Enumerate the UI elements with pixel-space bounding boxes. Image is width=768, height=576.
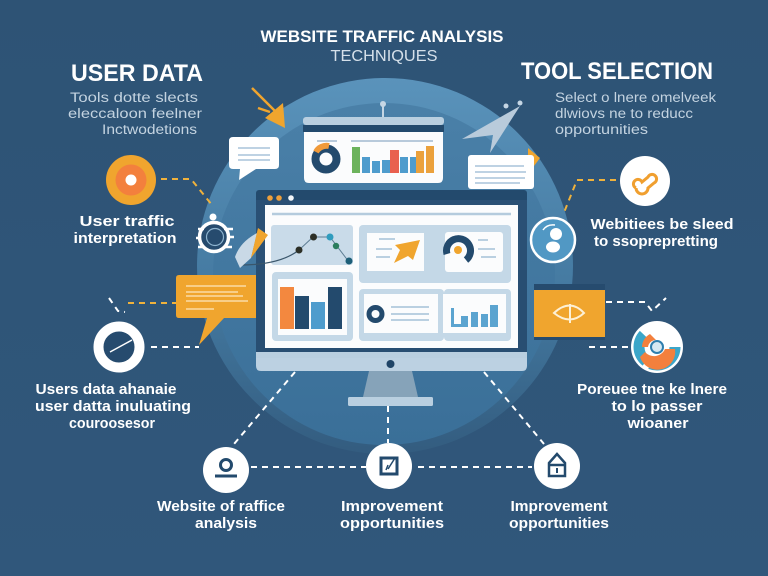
chart: donut <box>316 146 336 170</box>
label: improvement 1: Improvement <box>341 498 443 515</box>
title <box>260 28 504 65</box>
label: user traffic: interpretation <box>74 230 176 247</box>
label: websites: Webitiees be sleed <box>590 216 734 233</box>
connector: donut to box <box>589 346 632 348</box>
panel: top dashboard card <box>303 101 444 183</box>
label: website traffic analysis: Website of raffice <box>157 498 285 515</box>
icon: orange target <box>106 155 156 205</box>
text block: user data description: eleccaloon feelner <box>68 106 203 121</box>
text block: user data description <box>68 90 203 137</box>
label: websites <box>590 216 734 250</box>
label: users data: Users data ahanaie <box>36 381 176 398</box>
connector: bottom network <box>234 372 544 467</box>
label: users data: couroosesor <box>69 415 155 432</box>
label: website traffic analysis <box>157 498 285 532</box>
connector: ring to bubble <box>151 346 199 348</box>
label: improvement 1: opportunities <box>340 515 444 532</box>
icon: house <box>534 443 580 489</box>
text block: user data description: Tools dotte slects <box>70 90 198 105</box>
chart: bars <box>352 146 434 173</box>
heading: user data: USER DATA <box>71 60 203 87</box>
panel: arrow and spiral <box>359 225 511 283</box>
connector: target to gear <box>161 179 212 205</box>
heading: tool selection: TOOL SELECTION <box>521 58 713 85</box>
label: improvement 2: opportunities <box>509 515 609 532</box>
icon: chain <box>620 156 670 206</box>
monitor stand <box>363 371 418 397</box>
icon: blue circle people <box>531 218 575 262</box>
icon: colored donut <box>631 321 683 373</box>
label: website traffic analysis: analysis <box>195 515 257 532</box>
speech bubble: orange left <box>176 275 256 345</box>
background circles <box>197 78 573 454</box>
icon: white ring gauge <box>98 326 140 368</box>
label: users data: user datta inuluating <box>35 398 191 415</box>
text block: user data description: Inctwodetions <box>102 122 197 137</box>
speech bubble: left <box>229 137 279 180</box>
label: improvement 2 <box>509 498 609 532</box>
panel: small bars <box>443 289 511 341</box>
icon: gear <box>196 214 234 252</box>
arrow: orange top left <box>252 88 285 128</box>
panel: orange eye box <box>534 284 605 340</box>
icon: orange sail <box>235 228 268 268</box>
monitor <box>235 190 527 406</box>
panel: bar chart <box>272 272 353 341</box>
label: user traffic: User traffic <box>80 213 174 230</box>
connector: left bubble to circle <box>128 302 176 304</box>
label: pursue: to lo passer <box>612 398 703 415</box>
icon: location <box>203 447 249 493</box>
title: TECHNIQUES <box>330 48 438 65</box>
title: WEBSITE TRAFFIC ANALYSIS <box>260 28 504 46</box>
text block: tool selection description <box>555 90 716 137</box>
connector: chain to circle <box>563 180 616 215</box>
label: websites: to ssoprepretting <box>594 233 718 250</box>
text block: tool selection description: opportunities <box>555 122 648 137</box>
monitor screen <box>265 205 518 348</box>
label: pursue <box>577 381 727 432</box>
monitor frame <box>256 190 527 280</box>
text block: tool selection description: dlwiovs ne to reducc <box>555 106 693 121</box>
label: pursue: wioaner <box>626 415 689 432</box>
label: pursue: Poreuee tne ke lnere <box>577 381 727 398</box>
label: improvement 2: Improvement <box>510 498 608 515</box>
connector: eye box to donut <box>606 298 666 311</box>
panel: line chart <box>240 225 353 265</box>
arrow: paper plane top right <box>462 100 540 166</box>
label: users data <box>35 381 191 432</box>
icon: checkbox <box>366 443 412 489</box>
label: improvement 1 <box>340 498 444 532</box>
panel: ring list <box>359 289 444 341</box>
connector: white dash top <box>109 298 125 312</box>
label: user traffic <box>74 213 176 247</box>
speech bubble: right <box>468 155 534 189</box>
text block: tool selection description: Select o lnere omelveek <box>555 90 716 105</box>
